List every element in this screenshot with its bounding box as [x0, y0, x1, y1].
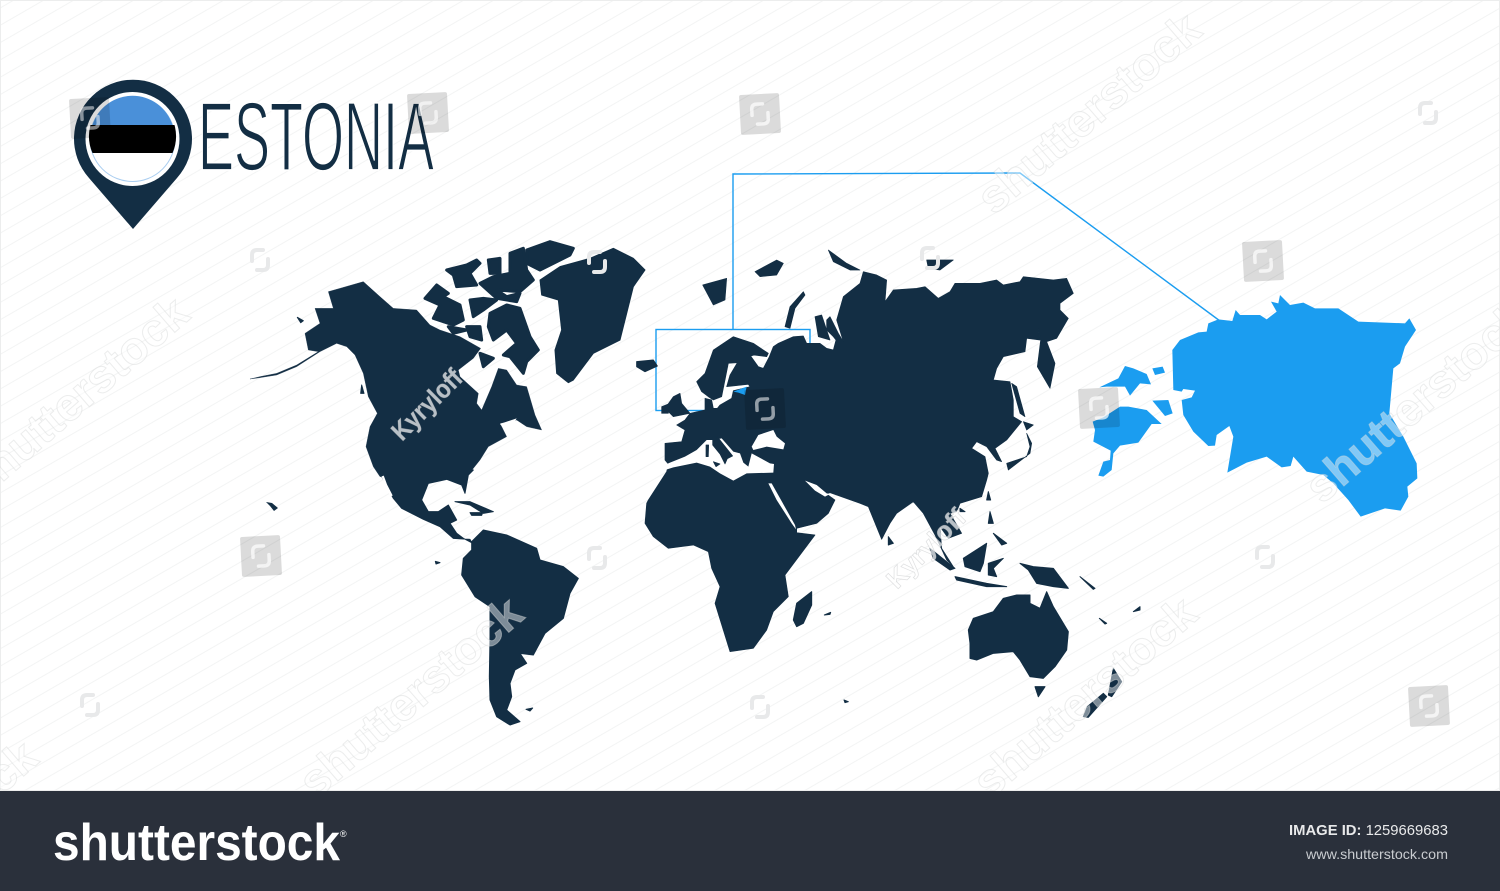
British Isles [665, 393, 690, 417]
image id: IMAGE ID: 1259669683 [1289, 822, 1448, 839]
footer logo: shutterstock [53, 814, 340, 872]
Hiiumaa [1099, 366, 1151, 396]
contributor watermark [385, 363, 972, 594]
callout frame around the Baltic region and leader line [656, 173, 1220, 410]
Persian Gulf [805, 481, 830, 497]
Black Sea [752, 430, 785, 450]
Muhu [1152, 400, 1173, 416]
Saaremaa [1093, 407, 1162, 477]
Mediterranean Sea [663, 438, 774, 481]
North America and Arctic islands [250, 242, 657, 477]
Sakhalin and Japan [1012, 383, 1025, 417]
Australia [968, 592, 1068, 678]
Hawaii [266, 502, 278, 511]
Greenland [540, 248, 645, 383]
watermark small marks [82, 103, 1436, 717]
location pin with Estonian flag [74, 80, 192, 229]
Central and South America [378, 470, 578, 725]
Arctic Eurasian islands [703, 278, 727, 305]
website: www.shutterstock.com [1305, 846, 1448, 862]
enlarged Estonia [1093, 295, 1417, 517]
Canadian Arctic archipelago [425, 242, 573, 373]
Iceland [637, 360, 657, 372]
Europe, Asia and Africa [645, 250, 1073, 652]
title: ESTONIA [198, 82, 434, 191]
mainland [1172, 295, 1417, 517]
contributor watermark: Kyryloff [880, 502, 972, 594]
Estonia marker on map [733, 387, 747, 395]
Southeast Asia, Madagascar and Oceania [793, 492, 1140, 717]
New Zealand [1083, 693, 1107, 717]
world map [250, 242, 1140, 725]
watermark tiles [69, 92, 1450, 727]
registered mark: ® [340, 829, 347, 839]
watermark wordmarks: shutterstock [288, 586, 533, 808]
Italy and Mediterranean islands [713, 437, 733, 464]
watermark wordmarks: shutterstock [962, 586, 1207, 808]
Red Sea [768, 483, 796, 529]
watermark wordmarks: shutterstock [966, 2, 1211, 224]
contributor watermark: Kyryloff [385, 363, 469, 446]
footer bar [0, 791, 1500, 891]
flag stripes [92, 96, 172, 125]
Vormsi [1152, 367, 1165, 375]
